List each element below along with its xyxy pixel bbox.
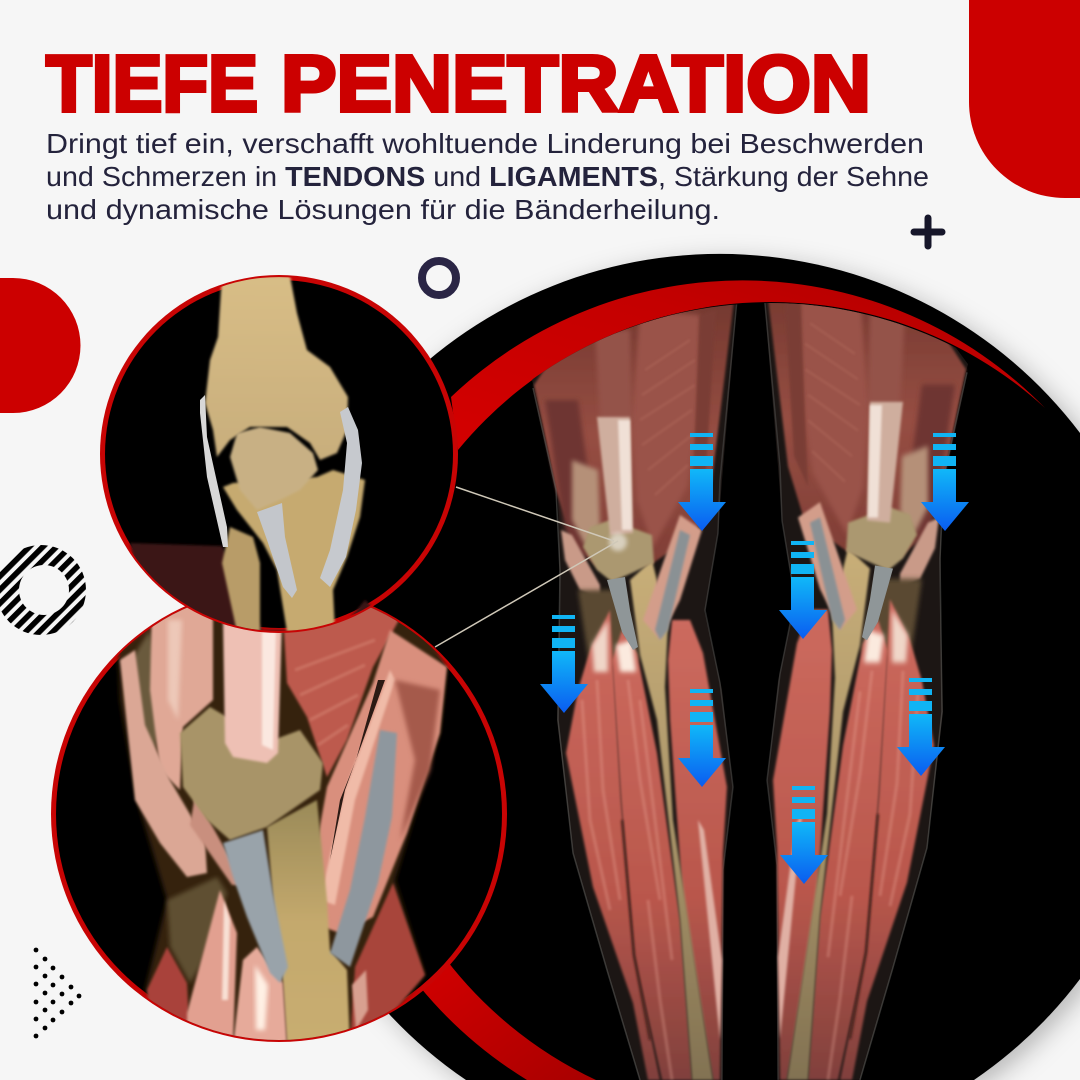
patella: [583, 520, 654, 582]
text block: description: und Schmerzen in TENDONS und LIGAMENTS, Stärkung der Sehne: [46, 161, 929, 192]
left leg: [532, 290, 738, 1080]
red band bottom: [420, 950, 596, 1080]
text block: description: und dynamische Lösungen für die Bänderheilung.: [46, 194, 720, 225]
decoration: red half pill left: [0, 278, 80, 413]
fibula: [167, 877, 227, 983]
text block: description: Dringt tief ein, verschafft wohltuende Linderung bei Beschwerden: [46, 128, 924, 159]
title: [46, 39, 871, 128]
fibula: [222, 527, 260, 632]
red crescent top: [451, 280, 1045, 450]
arrows: blue downward: [540, 433, 969, 884]
center ligament: [257, 503, 297, 598]
patellar ligament: [607, 577, 638, 650]
tibia: [630, 560, 713, 1080]
icon: plus: [914, 218, 942, 246]
right lower muscle: [350, 883, 425, 1045]
text block: description: [46, 128, 929, 225]
calves: [566, 610, 660, 1080]
left pink bursa: [120, 650, 207, 877]
panel: lower zoom circle muscles: [51, 586, 507, 1045]
icon: ring: [422, 261, 456, 295]
lower muscles: [145, 946, 190, 1021]
left ligament: [200, 395, 228, 547]
dark muscle: [130, 543, 380, 632]
dark knee area: [578, 590, 640, 670]
decoration: red corner shape top right: [969, 0, 1080, 198]
patella: [230, 427, 318, 510]
illustration: legs muscle anatomy: [532, 272, 968, 1080]
gray ligament lateral: [330, 730, 397, 967]
tibia: [223, 470, 365, 632]
connector lines: [435, 487, 627, 647]
femur: [205, 276, 348, 460]
right ligament: [320, 407, 362, 587]
gray ligament center: [223, 830, 288, 983]
patella: [180, 707, 323, 840]
tibia: [267, 800, 350, 1045]
quad tendon: [223, 620, 282, 763]
muscle background: [118, 590, 447, 1045]
icon: dot triangle: [34, 948, 81, 1038]
icon: striped ring: [0, 545, 86, 635]
tendons: [643, 515, 702, 640]
panel: upper zoom circle bones: [100, 275, 458, 633]
right leg: [762, 272, 968, 1080]
title: PENETRATION: [281, 39, 871, 128]
panel: large black circle with legs: [372, 247, 1080, 1080]
title: TIEFE: [46, 39, 258, 128]
